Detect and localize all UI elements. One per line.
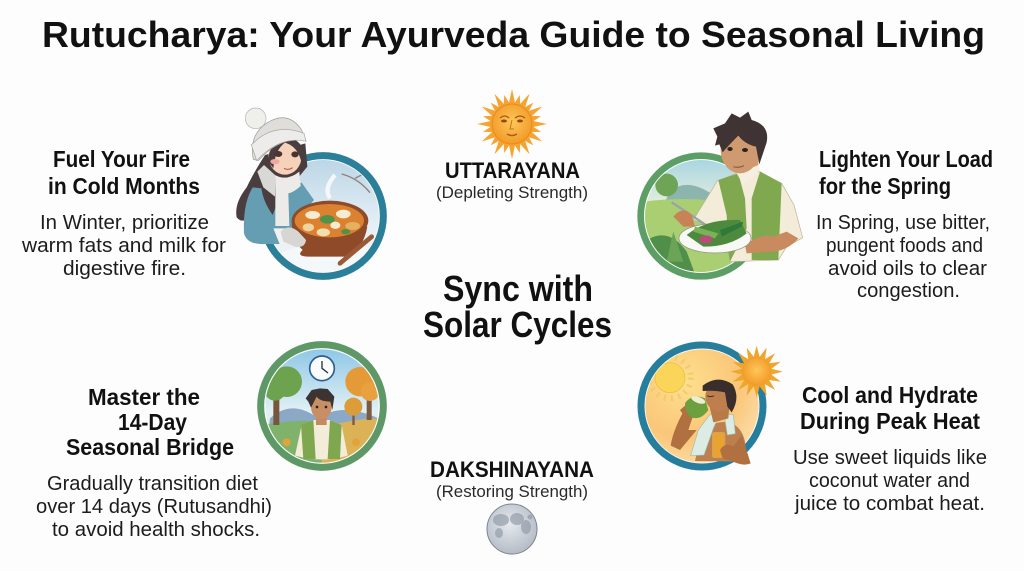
panel: winter text bbox=[21, 146, 226, 280]
heading: winter: in Cold Months bbox=[48, 173, 200, 199]
icon: man drinking coconut water under the sun bbox=[641, 345, 783, 467]
text block: seasonal bridge advice bbox=[36, 472, 272, 541]
icon: woman in winter clothes holding a bowl of stew bbox=[236, 108, 383, 277]
heading: seasonal bridge bbox=[66, 384, 234, 460]
bowl bbox=[292, 220, 367, 257]
raised arm bbox=[671, 412, 697, 450]
heading: peak heat bbox=[800, 382, 980, 434]
text block: peak heat advice: juice to combat heat. bbox=[794, 492, 985, 515]
text block: spring advice: avoid oils to clear bbox=[828, 257, 987, 280]
text block: peak heat advice: coconut water and bbox=[809, 469, 970, 492]
glass of juice bbox=[712, 432, 725, 458]
text block: spring advice: In Spring, use bitter, bbox=[816, 211, 990, 234]
center heading: Solar Cycles bbox=[423, 304, 612, 345]
heading: peak heat: Cool and Hydrate bbox=[802, 382, 978, 408]
vest bbox=[718, 173, 747, 262]
towel bbox=[691, 412, 721, 456]
heading: spring: Lighten Your Load bbox=[819, 146, 993, 172]
torso bbox=[695, 422, 747, 462]
text block: spring advice: pungent foods and bbox=[826, 234, 983, 257]
shirt and arms bbox=[693, 172, 803, 262]
coat bbox=[244, 183, 314, 244]
mitten bbox=[281, 227, 306, 247]
heading: winter: Fuel Your Fire bbox=[53, 146, 190, 172]
icon: man in green vest holding a plate of greens bbox=[641, 112, 803, 278]
cuff bbox=[273, 228, 305, 247]
icon: sun with face bbox=[477, 89, 547, 159]
text block: seasonal bridge advice: to avoid health shocks. bbox=[52, 518, 260, 541]
text block: spring advice: congestion. bbox=[857, 279, 960, 302]
neck and head bbox=[708, 398, 730, 422]
heading: peak heat: During Peak Heat bbox=[800, 408, 980, 434]
heading: seasonal bridge: 14-Day bbox=[118, 409, 187, 435]
icon: clock bbox=[310, 356, 334, 381]
text block: seasonal bridge advice: Gradually transition diet bbox=[47, 472, 258, 495]
label: Uttarayana: (Depleting Strength) bbox=[436, 184, 588, 202]
text block: spring advice bbox=[816, 211, 990, 302]
center heading bbox=[423, 268, 612, 345]
fork and hand bbox=[672, 202, 705, 224]
text block: winter advice bbox=[21, 211, 226, 280]
label: Dakshinayana: DAKSHINAYANA bbox=[430, 457, 594, 482]
scarf bbox=[257, 165, 275, 197]
panel: spring text bbox=[816, 146, 993, 302]
text block: peak heat advice: Use sweet liquids like bbox=[793, 446, 987, 469]
head bbox=[730, 145, 758, 173]
label: Uttarayana: UTTARAYANA bbox=[445, 158, 580, 183]
heading: winter bbox=[48, 146, 200, 199]
text block: peak heat advice bbox=[793, 446, 987, 515]
hair back bbox=[236, 143, 307, 221]
text block: winter advice: digestive fire. bbox=[63, 257, 186, 280]
text block: seasonal bridge advice: over 14 days (Rutusandhi) bbox=[36, 495, 272, 518]
coconut bbox=[685, 397, 708, 418]
plate of greens bbox=[679, 220, 751, 253]
heading: spring bbox=[819, 146, 993, 199]
heading: seasonal bridge: Master the bbox=[88, 384, 200, 410]
title: Rutucharya: Your Ayurveda Guide to Seasonal Living bbox=[42, 14, 985, 55]
label: Dakshinayana: (Restoring Strength) bbox=[436, 483, 588, 501]
icon: sun bbox=[731, 346, 783, 398]
label: Dakshinayana bbox=[430, 457, 594, 501]
hair bbox=[713, 112, 767, 164]
text block: winter advice: warm fats and milk for bbox=[21, 234, 226, 257]
heading: spring: for the Spring bbox=[819, 173, 951, 199]
panel: seasonal bridge text bbox=[36, 384, 272, 541]
icon: man between spring and autumn trees with clock bbox=[261, 345, 383, 468]
heading: seasonal bridge: Seasonal Bridge bbox=[66, 434, 234, 460]
icon: moon bbox=[487, 504, 537, 554]
text block: winter advice: In Winter, prioritize bbox=[40, 211, 209, 234]
panel: peak heat text bbox=[793, 382, 987, 515]
hat bbox=[252, 118, 306, 161]
center heading: Sync with bbox=[443, 268, 593, 309]
label: Uttarayana bbox=[436, 158, 588, 202]
